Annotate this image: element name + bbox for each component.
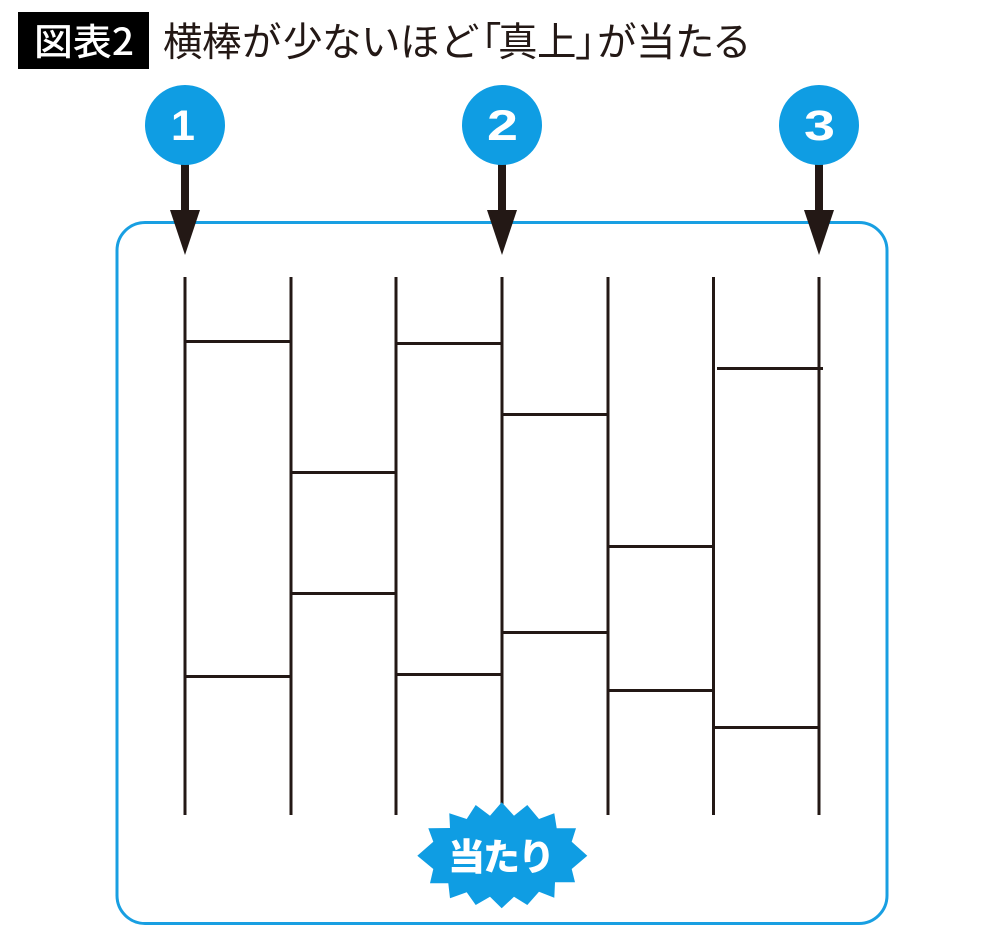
marker 3: numbered circle with arrow — [779, 85, 859, 255]
winning starburst badge — [417, 802, 587, 908]
marker 2: numbered circle with arrow: 2 — [487, 102, 518, 150]
panel: amida lottery frame — [117, 222, 887, 924]
marker 1: numbered circle with arrow — [145, 85, 225, 255]
ladder diagram — [185, 277, 823, 815]
winning starburst badge: 当たり — [448, 827, 555, 881]
title label badge: 図表2 — [34, 12, 134, 66]
marker 3: numbered circle with arrow: 3 — [804, 102, 835, 150]
title: 横棒が少ないほど「真上」が当たる — [163, 11, 752, 68]
marker 1: numbered circle with arrow: 1 — [171, 102, 195, 150]
marker 2: numbered circle with arrow — [462, 85, 542, 255]
title label badge — [18, 12, 149, 69]
